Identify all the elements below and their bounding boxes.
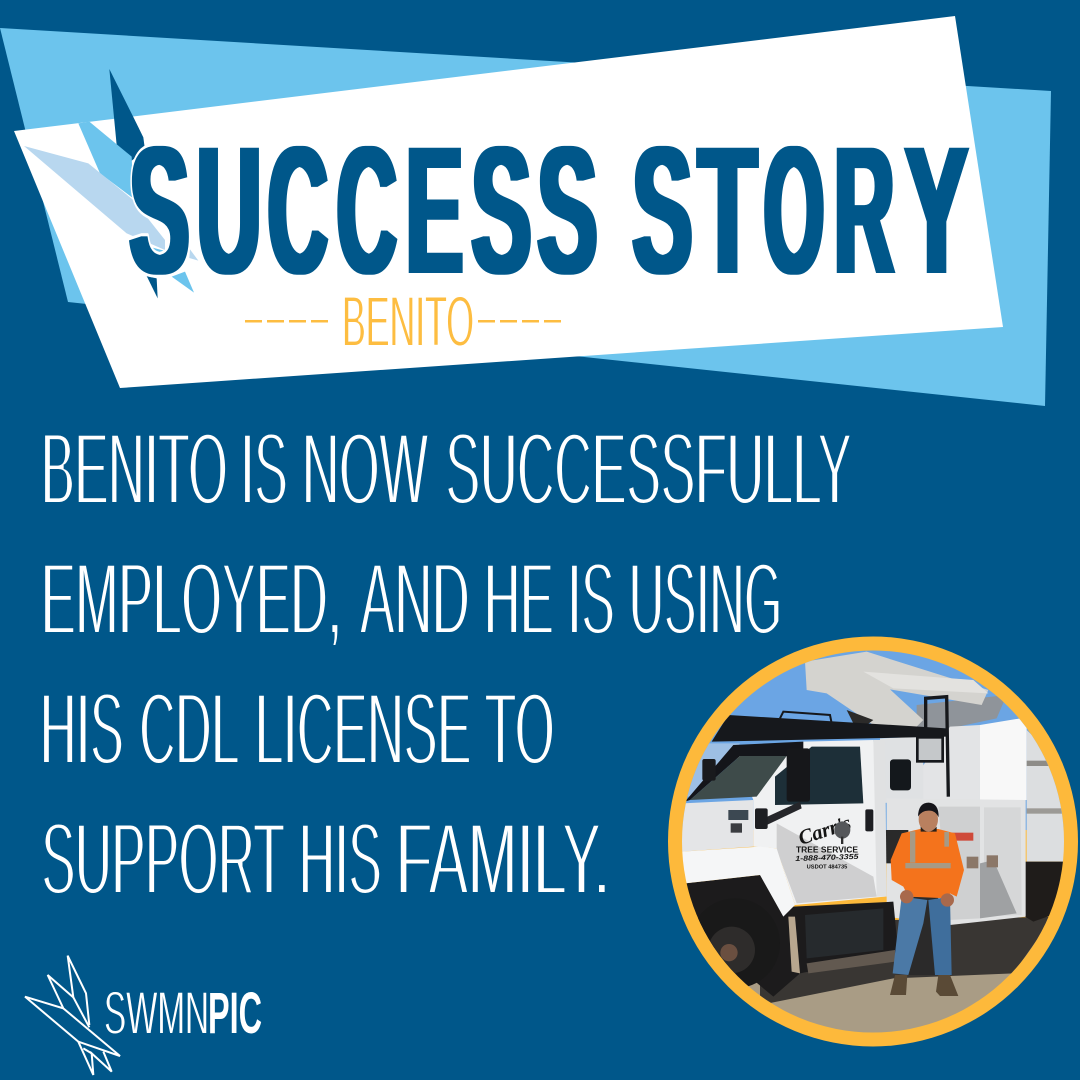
title: S [129, 108, 189, 312]
body text: HIS [40, 672, 124, 786]
title [129, 108, 968, 312]
photo door lettering [796, 818, 858, 868]
photo boom arm [805, 652, 988, 727]
photo fender [682, 847, 795, 917]
body text: HE [484, 542, 554, 656]
title: E [406, 108, 463, 312]
banner: light blue back panel [0, 28, 1051, 406]
icon: rocket shards behind title [24, 69, 198, 298]
body text [40, 412, 852, 916]
photo door lettering: TREE SERVICE [796, 846, 859, 855]
photo cab [733, 740, 885, 905]
photo shadow between legs [907, 897, 938, 975]
title: S [471, 108, 531, 312]
photo trees [917, 695, 1007, 728]
title: T [698, 108, 757, 312]
body text: IS [568, 542, 614, 656]
body text: FAMILY. [396, 802, 610, 916]
body text: LICENSE [255, 672, 471, 786]
title: C [268, 108, 328, 312]
body text: BENITO [41, 412, 228, 526]
body text: USING [629, 542, 782, 656]
title: U [197, 108, 261, 312]
logo wordmark PIC: PIC [208, 981, 262, 1046]
photo hood [682, 800, 753, 852]
body text: IS [240, 412, 288, 526]
body text: AND [360, 542, 470, 656]
photo wheel [698, 918, 757, 986]
photo ground [699, 920, 1047, 1032]
title: O [764, 108, 824, 312]
subtitle: name: BENITO [342, 283, 474, 362]
body text: NOW [302, 412, 428, 526]
photo door lettering: Carr's [796, 812, 854, 850]
photo rack [712, 715, 947, 742]
title: C [337, 108, 397, 312]
body text: SUPPORT [42, 802, 284, 916]
photo truck rear body [920, 725, 980, 800]
photo person [893, 897, 927, 975]
icon: logo rocket outline [25, 956, 120, 1075]
photo under-cab shadow [685, 875, 898, 997]
body text: EMPLOYED, [41, 542, 342, 656]
banner: white front panel [14, 16, 1003, 388]
photo: Benito standing by his truck [660, 630, 1080, 1050]
title: Y [905, 108, 968, 312]
title: S [129, 108, 189, 312]
body text: TO [485, 672, 554, 786]
title: S [632, 108, 692, 312]
logo: SWMN PIC [25, 956, 262, 1075]
body text: CDL [140, 672, 239, 786]
logo wordmark SWMN: SWMN [104, 979, 209, 1047]
body text: HIS [299, 802, 382, 916]
title: R [834, 108, 894, 312]
photo truck step [805, 908, 883, 958]
photo door lettering: 1-888-470-3355 [795, 852, 860, 863]
photo utility box [887, 798, 1026, 925]
title: S [537, 108, 597, 312]
photo sky [682, 650, 1064, 830]
photo door lettering: USDOT 484735 [807, 865, 847, 871]
photo shadow on door [777, 823, 877, 903]
